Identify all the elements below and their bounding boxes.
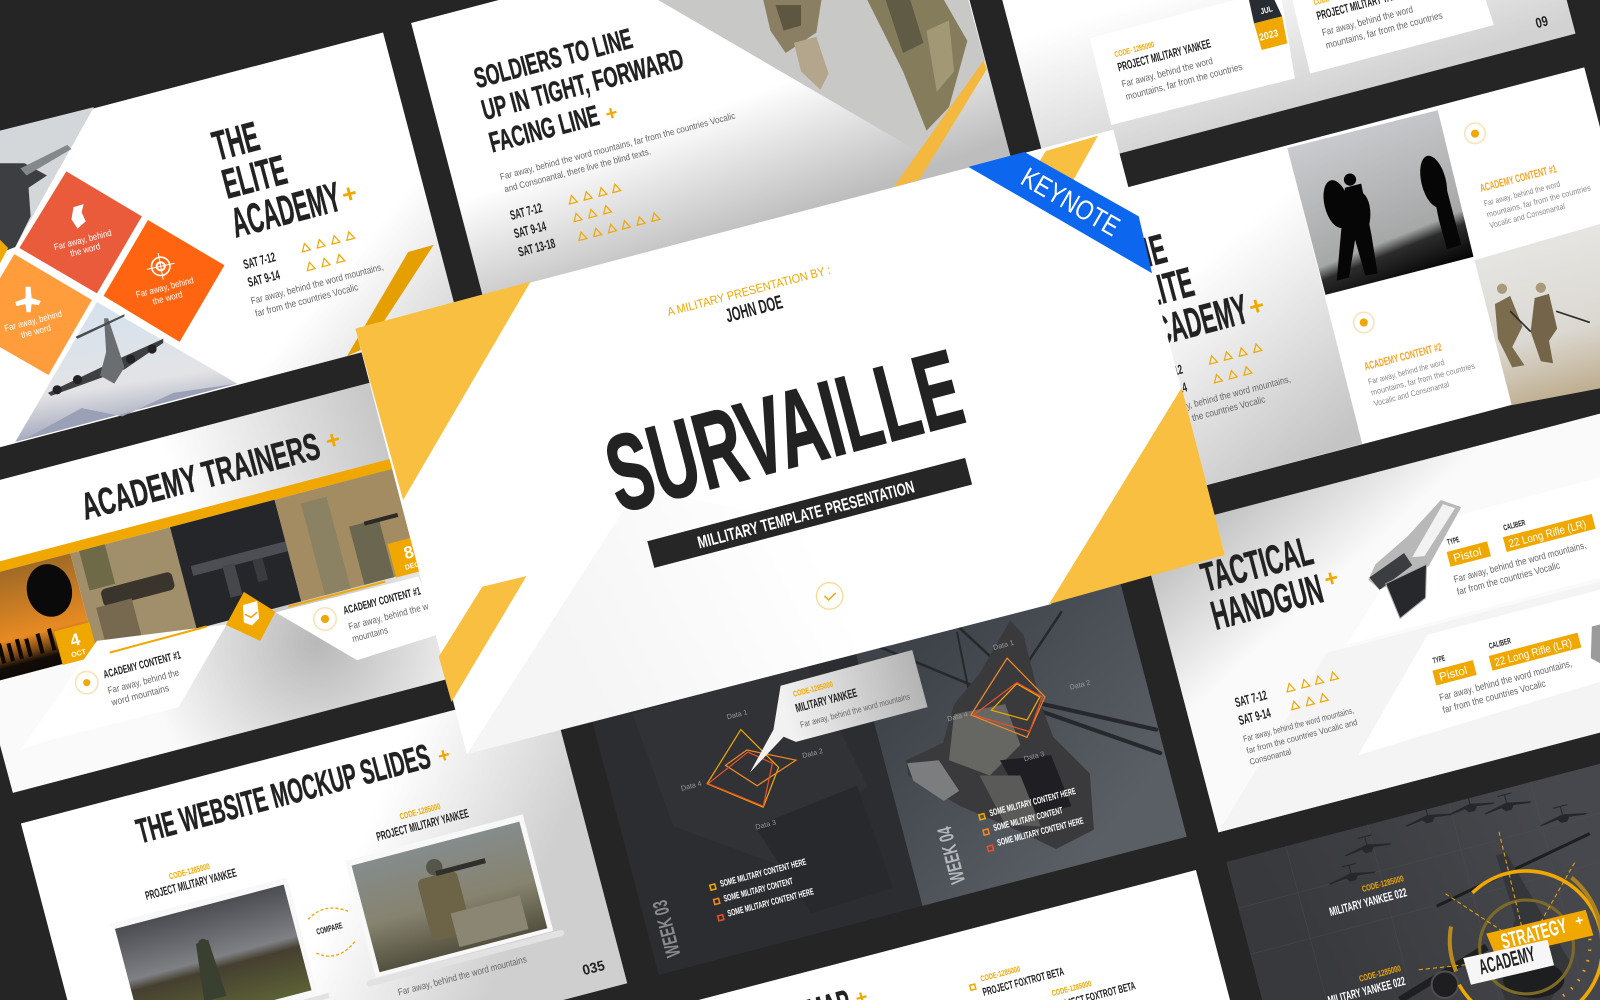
- heading: ACADEMY: [226, 173, 346, 246]
- card right text: Far away, behind the word: [1321, 4, 1414, 39]
- slide C text: [1113, 0, 1550, 138]
- left gradient panel: [1056, 148, 1362, 504]
- rating triangles: [1208, 343, 1267, 383]
- slide F lower background: [0, 500, 541, 793]
- date tab: 8 dec: [387, 535, 432, 578]
- project left label: CODE-1285000: [168, 861, 211, 881]
- date tab: year: 2023: [1258, 28, 1280, 44]
- yellow triangle top left: [355, 282, 531, 500]
- date tab: 8 dec: 8: [401, 541, 416, 563]
- heading: [1113, 209, 1253, 359]
- diamond: light orange: [0, 254, 92, 375]
- item one: CODE-1285000: [1361, 873, 1405, 894]
- photo: desert soldiers: [1474, 224, 1600, 405]
- specs bottom: Far away, behind the word mountains,: [1438, 658, 1573, 704]
- item two: [1050, 968, 1137, 1000]
- callout: CODE-1285000: [792, 680, 834, 699]
- callout: Far away, behind the word mountains: [799, 691, 912, 730]
- panel: the elite academy slide: [0, 32, 460, 465]
- subtle gray area: [467, 488, 1061, 754]
- photo: helicopter: [880, 612, 1160, 849]
- content left text: ACADEMY CONTENT #1: [102, 649, 182, 681]
- panel: week radar slide: [581, 538, 1187, 975]
- page number: 035: [581, 958, 607, 979]
- slide L text: [1302, 873, 1431, 1000]
- presenter name: JOHN DOE: [723, 291, 785, 327]
- schedule: SAT 7-12: [508, 200, 544, 223]
- diamond: red: [19, 171, 142, 293]
- item two: CODE-1285000: [1358, 963, 1402, 984]
- accent stripe: [347, 245, 434, 356]
- plus sign: +: [435, 744, 453, 768]
- photos strip: [0, 434, 513, 686]
- heading: TACTICAL: [1196, 527, 1318, 601]
- yellow stripe top right: [1031, 136, 1098, 184]
- radar chart: week 03: [707, 730, 796, 807]
- description: [250, 262, 388, 320]
- academy content 2: mountains, far from the countries: [1370, 361, 1476, 397]
- laptop left: [109, 877, 330, 1000]
- academy content 1: mountains, far from the countries: [1486, 183, 1592, 219]
- plus sign: +: [1246, 291, 1267, 322]
- diamond text: Far away, behind: [53, 228, 113, 252]
- description: far from the countries Vocalic: [254, 282, 360, 320]
- academy content 1: Vocalic and Consonantal: [1489, 202, 1566, 230]
- slide F upper background: [0, 358, 500, 639]
- academy content 2: Far away, behind the word: [1367, 358, 1446, 387]
- schedule: [507, 199, 557, 260]
- item one: [978, 954, 1065, 999]
- specs bottom: far from the countries Vocalic: [1441, 678, 1547, 716]
- specs bottom: 22 Long Rifle (LR): [1493, 637, 1574, 669]
- plus sign: +: [1321, 564, 1341, 593]
- project right label: PROJECT MILITARY YANKEE: [375, 806, 470, 844]
- description: and Consonantal, there live the blind texts.: [503, 146, 652, 194]
- specs bottom: TYPE: [1432, 654, 1446, 665]
- specs top: TYPE: [1446, 535, 1461, 547]
- targeting arrows: [1416, 832, 1576, 970]
- heading: THE WEBSITE MOCKUP SLIDES: [133, 738, 434, 851]
- schedule: SAT 7-12: [1149, 362, 1184, 384]
- schedule: SAT 7-12: [1233, 687, 1269, 710]
- silhouette: soldiers with backpacks: [1319, 153, 1461, 281]
- slide J text: [978, 937, 1137, 1000]
- description: Consonantal: [1248, 746, 1292, 767]
- panel: roadmap slide: [698, 870, 1230, 1000]
- date tab: 8 dec: DEC: [404, 560, 421, 572]
- schedule: SAT 9-14: [1153, 379, 1189, 402]
- diamond text: the word: [69, 241, 101, 259]
- diamond text: [135, 275, 197, 310]
- rating triangles: [300, 231, 360, 271]
- card: type bottom: [1358, 590, 1600, 755]
- rating triangles: [567, 175, 660, 241]
- schedule: SAT 13-18: [516, 235, 557, 260]
- date tab: 4 oct: OCT: [70, 648, 88, 659]
- small gold diamond: [0, 240, 8, 263]
- diamond text: Far away, behind: [3, 309, 63, 333]
- project right label: CODE-1285000: [399, 801, 442, 821]
- description: Far away, behind the word mountains,: [1157, 374, 1292, 419]
- slide B text: [469, 3, 757, 260]
- item two: [1323, 963, 1407, 1000]
- icon: medal: [71, 204, 86, 229]
- divider left: [110, 627, 207, 653]
- photo: soldiers: [658, 0, 985, 155]
- list week 04: SOME MILITARY CONTENT HERE: [996, 816, 1085, 848]
- content right text: Far away, behind the word: [347, 598, 441, 633]
- list week 03: SOME MILITARY CONTENT HERE: [719, 857, 807, 889]
- week 03 label: WEEK 03: [649, 898, 685, 959]
- slide G background: [21, 685, 627, 1000]
- laptop right: [335, 812, 565, 987]
- schedule: [241, 249, 282, 290]
- slide A text: [205, 90, 388, 320]
- week 04 background: [844, 538, 1187, 906]
- card left text: mountains, far from the countries: [1125, 62, 1244, 103]
- schedule: SAT 9-14: [512, 218, 548, 241]
- slide F text: [56, 405, 444, 709]
- icon: pistol: [1368, 500, 1461, 618]
- slide J background: [698, 870, 1230, 1000]
- heading: ELITE: [1125, 258, 1199, 320]
- diamond: dark orange: [104, 220, 224, 342]
- photo: sunset plane: [0, 553, 97, 685]
- keynote ribbon: KEYNOTE: [1016, 161, 1125, 242]
- specs top: far from the countries Vocalic: [1456, 560, 1561, 598]
- slide B background: [411, 0, 1017, 319]
- mini planes: [1316, 768, 1589, 887]
- content right text: mountains: [351, 625, 389, 645]
- cover text: [571, 239, 984, 573]
- diamond text: the word: [20, 323, 52, 340]
- card: project left: [1090, 0, 1295, 125]
- academy content 2: Vocalic and Consonantal: [1373, 380, 1450, 408]
- description: Far away, behind the word mountains,: [1242, 705, 1355, 744]
- card left text: [1113, 20, 1244, 103]
- specs bottom: Pistol: [1438, 665, 1469, 684]
- item one: [1325, 873, 1409, 919]
- description: [1157, 374, 1295, 432]
- list week 04: SOME MILITARY CONTENT HERE: [988, 786, 1077, 818]
- targeting ring: [1450, 871, 1600, 1000]
- description: far from the countries Vocalic: [1161, 394, 1267, 432]
- slide C background: [970, 0, 1576, 172]
- diamond text: the word: [151, 289, 184, 307]
- icon: target: [147, 253, 174, 280]
- accent stripe: [894, 60, 987, 187]
- plus sign: +: [339, 179, 360, 210]
- panel: website mockup slide: [21, 685, 627, 1000]
- panel: main survaille cover slide: [355, 130, 1225, 754]
- bullet: [970, 984, 976, 990]
- specs top: 22 Long Rifle (LR): [1508, 519, 1588, 550]
- heading: [469, 12, 695, 159]
- academy content 2: [1363, 335, 1479, 408]
- slide G text: [125, 708, 607, 1000]
- radar labels week 03: Data 2: [802, 747, 824, 760]
- schedule: SAT 7-12: [242, 249, 277, 272]
- content left text: Far away, behind the: [107, 668, 180, 697]
- icon: small pistol: [1591, 624, 1600, 663]
- title: SURVAILLE: [594, 326, 974, 535]
- academy content 1: Far away, behind the word: [1483, 179, 1561, 208]
- icon: plane: [15, 287, 41, 312]
- date tab: 4 oct: 4: [68, 629, 83, 651]
- schedule: [1148, 362, 1189, 402]
- specs top: CALIBER: [1502, 518, 1526, 533]
- academy content 2: ACADEMY CONTENT #2: [1363, 342, 1443, 373]
- diamond text: [53, 228, 115, 262]
- radar labels week 04: Data 4: [946, 710, 969, 723]
- specs bottom: [1429, 619, 1589, 716]
- description: far from the countries Vocalic and: [1245, 717, 1359, 756]
- heading: [1196, 527, 1328, 639]
- date tab: month: JUL: [1259, 4, 1274, 16]
- content right text: ACADEMY CONTENT #1: [342, 585, 422, 617]
- list week 04: [988, 786, 1085, 848]
- specs bottom: CALIBER: [1488, 636, 1512, 651]
- subtitle bar: MILLITARY TEMPLATE PRESENTATION: [695, 476, 917, 553]
- strategy tag: [1486, 909, 1593, 958]
- photo: desert soldiers: [275, 444, 512, 601]
- heading: UP IN TIGHT, FORWARD: [478, 43, 687, 127]
- strategy tag: +: [1573, 912, 1586, 930]
- card: content right: [276, 577, 444, 660]
- radar labels week 03: Data 1: [726, 708, 748, 721]
- plus sign: +: [603, 102, 620, 126]
- photo: soldier with rifle: [70, 527, 197, 655]
- card right text: mountains, far from the countries: [1325, 10, 1444, 52]
- schedule: SAT 9-14: [246, 267, 282, 290]
- content right text: [342, 582, 444, 645]
- radar chart: week 04: [971, 658, 1045, 737]
- compare label: COMPARE: [315, 920, 344, 937]
- panel: tactical handgun slide: [1140, 396, 1600, 832]
- heading: HANDGUN: [1206, 566, 1328, 639]
- heading: FACING LINE: [486, 100, 603, 159]
- bullets: [710, 814, 994, 921]
- project left label: [141, 855, 238, 903]
- list week 04: SOME MILITARY CONTENT: [992, 805, 1064, 833]
- week 04 label: WEEK 04: [934, 824, 970, 886]
- photo: silhouettes: [1287, 110, 1473, 295]
- schedule: [1232, 687, 1273, 728]
- list week 03: [719, 857, 815, 919]
- keynote ribbon: [968, 152, 1152, 273]
- heading: THE: [1115, 225, 1171, 282]
- radar labels week 03: [680, 708, 824, 832]
- heading: ACADEMY TRAINERS: [77, 425, 324, 528]
- photo: helicopter: [0, 107, 94, 253]
- slide E text: [1112, 116, 1600, 462]
- schedule: SAT 9-14: [1237, 705, 1273, 728]
- panel: academy content slide: [1056, 67, 1600, 504]
- heading: ELITE: [217, 146, 291, 208]
- plus sign: +: [323, 426, 343, 456]
- slide K text: [1195, 456, 1600, 767]
- icon: helmet badge: [1354, 312, 1374, 333]
- radar labels week 03: Data 4: [680, 780, 702, 793]
- radar labels week 04: Data 2: [1069, 679, 1091, 692]
- date tab: 4 oct: [54, 622, 98, 665]
- big plane: [1400, 834, 1590, 1000]
- card left text: Far away, behind the word: [1120, 56, 1214, 90]
- rating triangles: [1285, 671, 1343, 710]
- grid lines: [1239, 782, 1600, 1000]
- academy tag: ACADEMY: [1476, 942, 1538, 979]
- panel: strategy academy slide: [1226, 764, 1600, 1000]
- radar labels week 04: Data 1: [992, 639, 1015, 652]
- panel: academy trainers slide: [0, 358, 541, 793]
- slide E background: [1056, 67, 1600, 504]
- slide H text: [719, 786, 1085, 919]
- date tab: month: [1249, 0, 1282, 23]
- yellow stripe bottom left: [439, 576, 527, 702]
- diamond text: [3, 309, 66, 344]
- item one: CODE-1285000: [979, 964, 1022, 984]
- description: Far away, behind the word mountains: [397, 954, 528, 999]
- week 03 background: [581, 608, 922, 975]
- slide L background: [1226, 764, 1600, 1000]
- specs top: [1443, 501, 1600, 598]
- lower shading: [1218, 582, 1600, 832]
- icon: flame badge: [76, 671, 98, 694]
- list week 03: SOME MILITARY CONTENT: [722, 876, 794, 904]
- item two: CODE-1285000: [1051, 979, 1093, 998]
- date tab: year: [1254, 16, 1287, 50]
- card: content left: [20, 624, 227, 750]
- specs top: Pistol: [1452, 546, 1483, 565]
- card left text: PROJECT MILITARY YANKEE: [1116, 37, 1212, 74]
- item one: MILITARY YANKEE 022: [1328, 885, 1408, 919]
- accent band: [0, 434, 486, 583]
- academy tag: [1463, 940, 1554, 985]
- list week 03: SOME MILITARY CONTENT HERE: [726, 886, 815, 919]
- cover background: [355, 130, 1225, 754]
- description: Far away, behind the word mountains,: [250, 262, 385, 307]
- description: [1242, 705, 1362, 767]
- page number: 09: [1534, 14, 1550, 32]
- divider right: [288, 582, 385, 607]
- academy content 1: [1479, 156, 1595, 230]
- icon: grenade badge: [1465, 123, 1485, 144]
- content left text: [102, 649, 190, 709]
- icon: hazard badge: [314, 608, 336, 630]
- content left text: word mountains: [110, 683, 171, 709]
- photo: transport plane: [15, 302, 237, 442]
- subtitle bar: [647, 458, 972, 568]
- item one: PROJECT FOXTROT BETA: [981, 966, 1065, 999]
- compare arrows: [308, 908, 356, 956]
- panel: soldiers to line slide: [411, 0, 1017, 319]
- icon: check badge: [816, 583, 843, 609]
- heading: ACADEMY: [1133, 285, 1253, 359]
- card: project right: [1292, 0, 1494, 73]
- heading: THE: [208, 112, 264, 170]
- project left label: PROJECT MILITARY YANKEE: [144, 866, 238, 903]
- card left text: CODE- 1285000: [1114, 40, 1156, 59]
- project right label: [372, 795, 470, 844]
- description: Far away, behind the word mountains, far from the countries Vocalic: [499, 111, 737, 182]
- radar labels week 03: Data 3: [755, 818, 777, 832]
- diamond text: Far away, behind: [135, 275, 195, 300]
- presenter line: A MILITARY PRESENTATION BY :: [666, 263, 832, 319]
- panel: project cards slide: [970, 0, 1576, 172]
- badge: shield diamond: [226, 592, 276, 641]
- radar labels week 04: [946, 639, 1091, 763]
- callout: MILITARY YANKEE: [794, 686, 859, 715]
- heading: [206, 96, 346, 246]
- photo: assault rifle: [170, 500, 301, 629]
- slide A background: [0, 32, 460, 465]
- callout: [750, 650, 928, 772]
- radar labels week 04: Data 3: [1023, 750, 1045, 763]
- slide K background: [1140, 396, 1600, 832]
- card: type top: [1346, 478, 1600, 645]
- yellow triangle bottom right: [1049, 388, 1225, 604]
